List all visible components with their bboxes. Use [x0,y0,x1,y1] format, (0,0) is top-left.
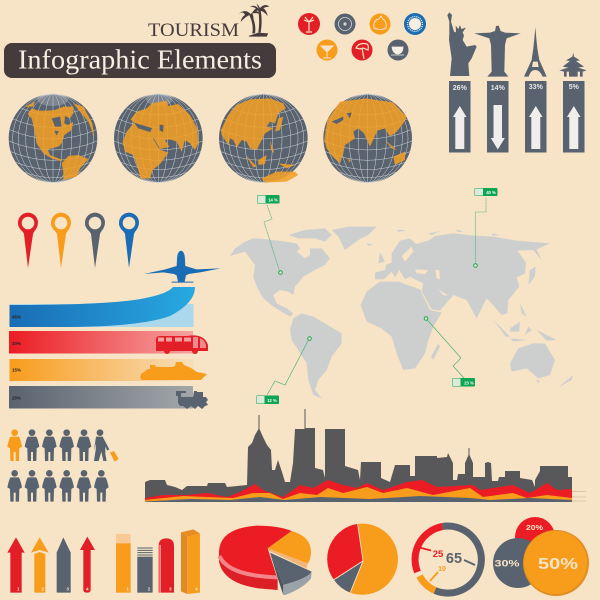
column 4: 4 [195,587,198,592]
orange sector edge [268,548,308,569]
icon: locomotive [176,391,208,409]
column chart [116,529,200,594]
icon: parasol [352,40,372,60]
pin: blue [119,213,139,268]
orange sector [350,523,398,595]
bubble: 50%: 50% [538,556,578,573]
orange arc 10 [420,576,435,590]
transport share: bus 20% [9,331,193,354]
row one people [25,429,91,461]
icon: cocktail [316,40,338,60]
tick: 10 [430,572,438,581]
callout: Russia 40% [474,188,498,267]
North America [230,238,330,317]
callout: South America 12% [256,337,311,404]
Greenland [332,227,377,250]
icon: palm [298,13,320,35]
airplane [144,251,221,283]
transport share: train 20%: 20% [12,396,21,400]
Madagascar [431,343,440,360]
transport share: ship 15% [10,359,194,381]
bubble: 30%: 30% [494,558,520,570]
arrow chart [7,537,95,593]
Africa [361,282,442,370]
transport share: plane 45%: 45% [12,314,21,320]
traveller with suitcase [94,429,119,462]
red sector [327,524,363,580]
icon: bag [370,14,390,34]
pin: gray [85,213,105,268]
tourism heading: TOURISM [148,21,239,41]
icon: ship [140,362,207,380]
percent bar: 5% up: 5% [569,84,580,91]
transport share: ship 15%: 15% [12,368,21,372]
tick: 25 [420,548,431,550]
tick: 65 [464,560,475,565]
person: highlighted [7,429,22,461]
red arc 25 [415,526,442,572]
donut labels [433,549,462,573]
percent bar: 33% up: 33% [529,84,544,91]
globe: Asia and Australia [219,94,308,183]
bubble chart [493,517,589,596]
landmark: Christ the Redeemer [474,26,521,77]
callout: South America 12%: 12 % [267,398,277,403]
percent bar: 5% up [563,81,584,152]
pin: red [18,213,38,268]
South America [290,313,342,398]
transport share: plane 45% [10,287,195,327]
callout: North America 14% [257,195,282,274]
icon: coffee cup [388,40,408,60]
percent bar: 33% up [525,81,546,152]
donut gauge [415,526,481,593]
percent bar: 26% up [449,81,470,152]
transport share: train 20% [9,386,193,408]
title banner: Infographic Elements [18,44,262,74]
red sector side [219,552,278,590]
slate sector left side [270,553,283,595]
percent bar: 14% down [487,81,508,152]
arrow 1: 1 [17,587,20,592]
orange data band [145,487,572,502]
red data band [145,480,572,502]
orange sector [268,531,311,563]
icon: dial [334,14,356,34]
Eurasia [367,229,557,341]
donut labels: 25 [433,549,444,560]
red sector top [219,526,292,579]
arrow 4: 4 [86,587,89,592]
column 3: 3 [169,587,172,592]
callout: North America 14%: 14 % [268,198,278,202]
people pictograms [7,429,119,502]
Australia [510,343,555,378]
New Zealand [537,375,573,387]
landmark: Eiffel Tower [524,27,547,77]
Asian and Arctic islands [367,229,557,341]
percent bar: 26% up: 26% [453,85,468,92]
travel icons [298,13,426,60]
3D pie chart [219,526,312,595]
row two people [7,470,109,502]
column 2: 2 [148,587,151,592]
landmark: Statue of Liberty [447,12,477,76]
icon: bus [156,335,208,354]
pink stripe [219,556,278,577]
transport share: bus 20%: 20% [12,341,21,346]
flat pie chart [327,523,398,595]
column 1: 1 [126,587,129,592]
landmark: pagoda [559,53,587,77]
arrow 3: 3 [66,587,69,592]
donut labels: 10 [438,566,446,573]
pin: orange [51,213,71,268]
map pins [18,213,139,268]
palm tree icon [239,3,269,37]
icon: sun [404,13,426,35]
skyline silhouette [145,409,572,502]
exploded slate sector [270,553,312,585]
city skyline chart [145,409,586,502]
slate arc 65 [435,526,481,593]
world map [230,227,573,398]
bubble: 20%: 20% [526,525,544,532]
chart leader lines [572,492,586,501]
globe: Indian Ocean [323,94,412,183]
slate data band [145,496,572,502]
callout: Russia 40%: 40 % [486,190,496,195]
globe: Americas [9,94,97,183]
callout: Africa 23%: 23 % [464,380,474,385]
Arctic islands [288,228,332,242]
slate sector [334,561,363,593]
donut labels: 65 [446,551,462,567]
arrow 2: 2 [41,587,44,592]
slate sector rim [283,572,312,595]
callout: Africa 23% [424,317,475,386]
percent bar: 14% down: 14% [491,85,506,92]
globe: Africa and Europe [114,94,203,183]
